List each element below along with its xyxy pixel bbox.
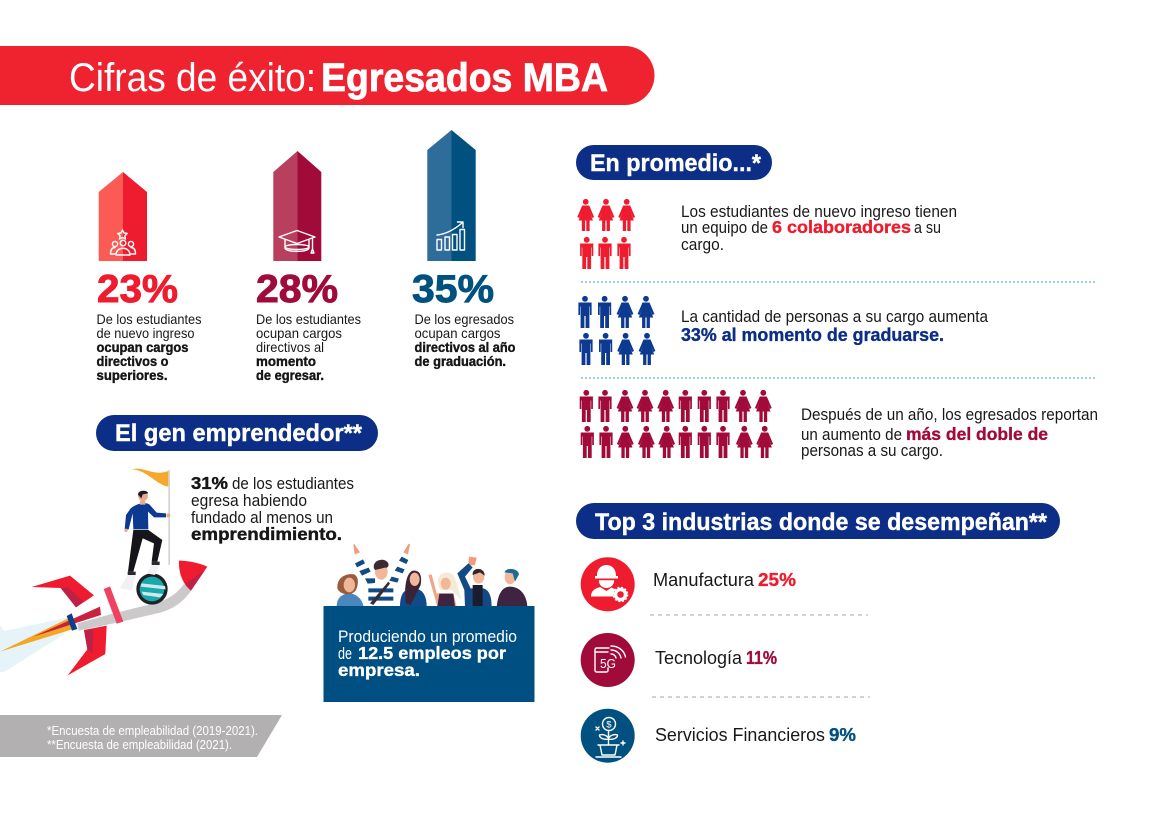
text: 31% founded a venture: de los estudiantes <box>232 475 354 493</box>
value 35%: 35% <box>412 268 494 311</box>
description 28%: De los estudiantes <box>256 312 361 327</box>
icon: maroon arrow with graduation cap <box>273 151 321 261</box>
text: 31% founded a venture: emprendimiento. <box>191 524 342 544</box>
heading: El gen emprendedor <box>96 415 378 451</box>
description 23%: superiores. <box>96 368 168 383</box>
panel: 35% statistic <box>412 130 516 369</box>
description 23% <box>96 312 202 383</box>
heading: El gen emprendedor: El gen emprendedor** <box>115 420 363 447</box>
person with flag <box>120 469 170 590</box>
text: more than double: más del doble de <box>906 424 1048 444</box>
callout: average jobs per company: de <box>338 645 352 663</box>
person 1 <box>337 574 363 607</box>
text: Manufactura 25%: Manufactura <box>653 570 755 590</box>
pictogram: 6 red people <box>577 199 635 269</box>
callout: average jobs per company: empresa. <box>338 660 420 680</box>
description 28% <box>256 312 361 383</box>
heading: Top 3 industrias: Top 3 industrias donde se desempeñan** <box>595 509 1048 536</box>
text: team grows 33% <box>681 308 988 345</box>
callout: average jobs per company <box>324 606 534 702</box>
text: 31% founded a venture: fundado al menos un <box>191 509 333 527</box>
text: 31% founded a venture: egresa habiendo <box>191 492 307 510</box>
footnote: *Encuesta de empleabilidad (2019-2021). <box>47 724 258 738</box>
icon: technology 5G phone: 5G <box>600 657 616 671</box>
text: Servicios Financieros 9%: 9% <box>829 724 856 745</box>
text: 31% founded a venture <box>191 473 354 544</box>
icon: manufacturing worker <box>581 557 635 611</box>
description 23%: directivos o <box>96 354 168 369</box>
icon: financial services plant <box>581 709 635 763</box>
text: Tecnología 11% <box>655 647 777 668</box>
pictogram: 8 blue people <box>578 296 655 365</box>
text: new students team: 6 colaboradores <box>772 217 911 237</box>
value 23%: 23% <box>97 268 178 311</box>
callout: average jobs per company: Produciendo un promedio <box>338 628 517 646</box>
value 28%: 28% <box>256 268 338 311</box>
pictogram: 20 maroon people <box>580 390 773 458</box>
text: team grows 33%: 33% al momento de graduarse. <box>681 325 944 345</box>
description 35%: de graduación. <box>414 354 506 369</box>
footnote <box>0 715 282 757</box>
text: Manufactura 25%: 25% <box>758 569 796 590</box>
text: team grows 33%: La cantidad de personas a su cargo aumenta <box>681 308 988 326</box>
icon: red arrow with people and star <box>99 172 147 261</box>
text: Tecnología 11%: Tecnología <box>655 648 743 668</box>
description 35%: ocupan cargos <box>414 326 501 341</box>
description 35%: De los egresados <box>414 312 514 327</box>
text: new students team: cargo. <box>681 236 724 254</box>
text: new students team: a su <box>914 219 941 237</box>
text: new students team: Los estudiantes de nuevo ingreso tienen <box>681 203 957 221</box>
rocket fins <box>32 576 107 675</box>
person 2 <box>353 544 411 607</box>
description 23%: de nuevo ingreso <box>96 326 194 341</box>
text: Servicios Financieros 9%: Servicios Financieros <box>655 725 825 745</box>
description 35% <box>414 312 516 369</box>
text: Manufactura 25% <box>653 569 796 590</box>
text: more than double <box>801 406 1098 460</box>
title banner <box>0 46 654 105</box>
description 23%: De los estudiantes <box>96 312 202 327</box>
title banner: Cifras de éxito: <box>69 56 316 100</box>
heading: En promedio: En promedio...* <box>590 150 762 177</box>
person 3 <box>400 571 427 607</box>
icon: financial services plant: $ <box>606 720 612 730</box>
panel: 28% statistic <box>256 151 361 383</box>
heading: En promedio <box>576 145 772 180</box>
callout: average jobs per company: 12.5 empleos por <box>358 643 506 663</box>
description 35%: directivos al año <box>414 340 516 355</box>
icon: blue arrow with growth chart <box>427 130 476 261</box>
description 28%: ocupan cargos <box>256 326 342 341</box>
footnote: **Encuesta de empleabilidad (2021). <box>47 738 232 752</box>
text: Tecnología 11%: 11% <box>746 647 777 668</box>
text: new students team <box>681 203 957 254</box>
person 5 <box>457 557 492 607</box>
text: 31% founded a venture: 31% <box>191 473 228 493</box>
title banner: Egresados MBA <box>321 56 608 100</box>
person 4 <box>428 573 462 607</box>
text: more than double: personas a su cargo. <box>801 442 943 460</box>
description 28%: momento <box>256 354 316 369</box>
text: more than double: un aumento de <box>801 426 902 444</box>
rocket body <box>77 561 207 631</box>
person 6 <box>497 569 527 607</box>
rocket exhaust <box>0 607 101 673</box>
illustration: rocket with person holding flag <box>0 469 207 675</box>
description 28%: directivos al <box>256 340 324 355</box>
panel: 23% statistic <box>96 172 202 383</box>
illustration: group of cheering people <box>337 544 527 607</box>
description 28%: de egresar. <box>256 368 324 383</box>
text: new students team: un equipo de <box>681 219 768 237</box>
text: more than double: Después de un año, los egresados reportan <box>801 406 1098 424</box>
description 23%: ocupan cargos <box>96 340 188 355</box>
icon: technology 5G phone <box>581 633 635 687</box>
